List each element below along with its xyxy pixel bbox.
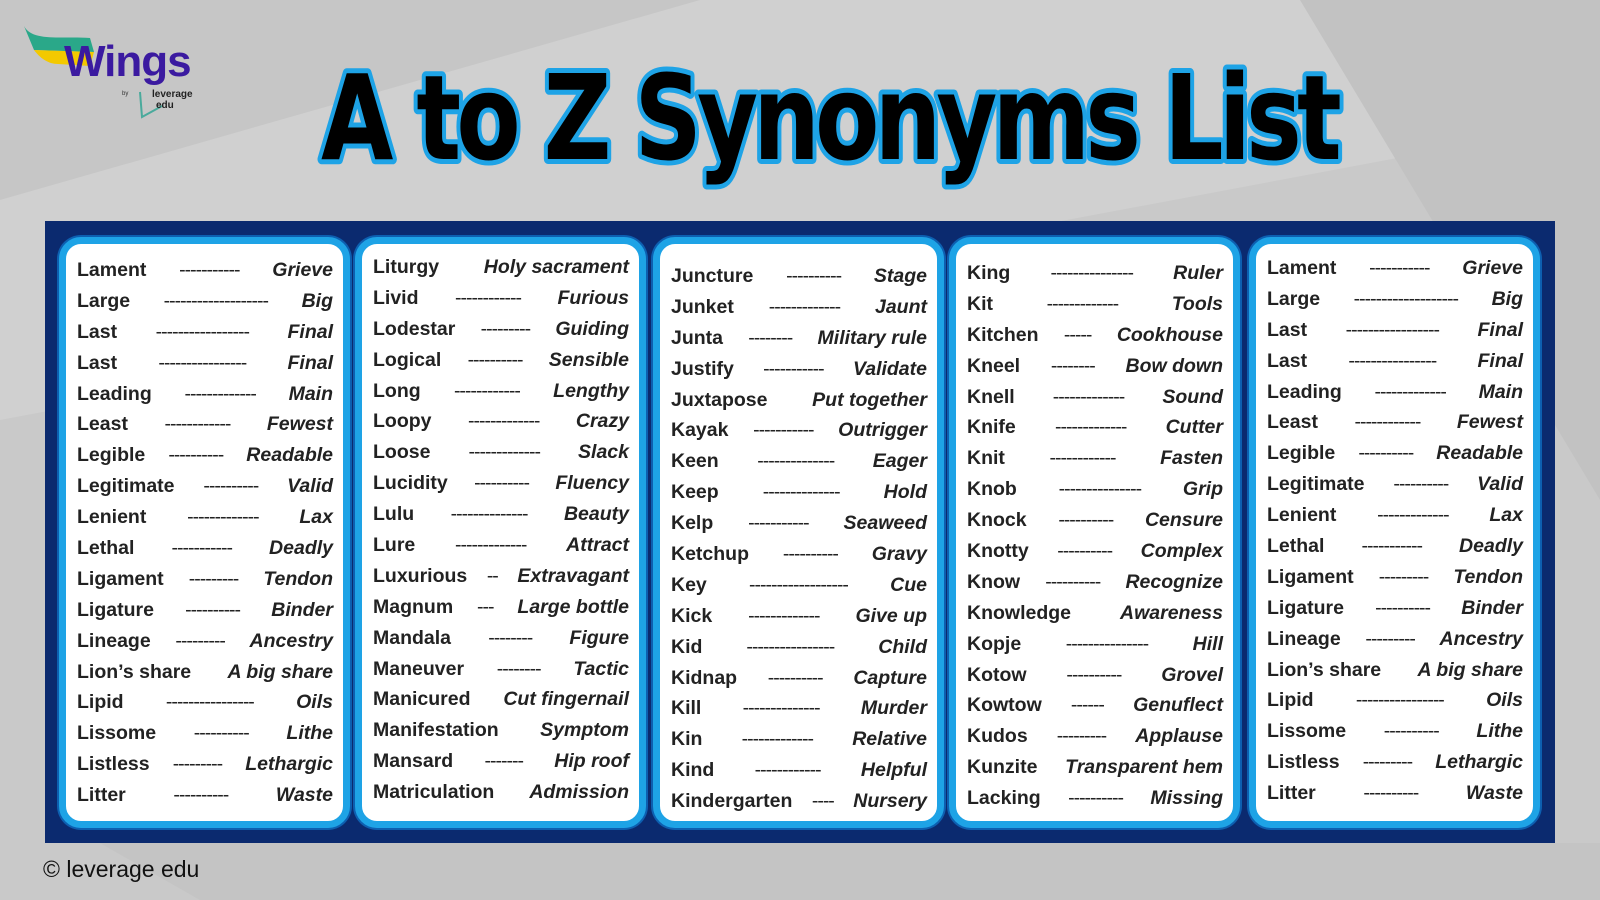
logo: Wings: Wings — [64, 37, 191, 86]
card: column 3: -------- — [748, 327, 792, 349]
card: column 3: Cue — [890, 574, 927, 596]
card: column 4: -------- — [1051, 355, 1095, 377]
card: column 4: Kunzite — [967, 756, 1037, 778]
card: column 2: Lodestar — [373, 318, 455, 340]
card: column 4: --------------- — [1059, 478, 1141, 500]
card: column 1: Large — [77, 290, 130, 312]
card: column 4: --------------- — [1066, 633, 1148, 655]
card: column 1: --------- — [173, 753, 222, 775]
card: column 5: Oils — [1486, 689, 1523, 711]
card: column 5: Lenient — [1267, 504, 1336, 526]
card: column 5 — [1249, 237, 1540, 828]
card: column 5: --------- — [1379, 566, 1428, 588]
card: column 3: Kick — [671, 605, 712, 627]
card: column 2 — [355, 237, 646, 828]
card: column 4: --------- — [1057, 725, 1106, 747]
card: column 1: Lament — [77, 259, 146, 281]
card: column 3: Kid — [671, 636, 702, 658]
card: column 1: Ancestry — [250, 630, 333, 652]
card: column 4: Bow down — [1126, 355, 1223, 377]
card: column 5: ---------- — [1384, 720, 1439, 742]
card: column 5: Lissome — [1267, 720, 1346, 742]
card: column 4: Knell — [967, 386, 1015, 408]
card: column 3: ------------------ — [749, 574, 848, 596]
card: column 1: Lipid — [77, 691, 124, 713]
card: column 4: ---------- — [1066, 664, 1121, 686]
card: column 4: Grip — [1183, 478, 1223, 500]
card: column 1: Final — [287, 352, 333, 374]
card: column 3: Stage — [874, 265, 927, 287]
card: column 4: ------------ — [1050, 447, 1115, 469]
card: column 4: ----- — [1064, 324, 1091, 346]
card: column 2: Furious — [558, 287, 629, 309]
card: column 2: Manifestation — [373, 719, 499, 741]
card: column 2: Lulu — [373, 503, 414, 525]
card: column 1: Lissome — [77, 722, 156, 744]
card: column 3: ----------- — [753, 419, 814, 441]
card: column 4: Missing — [1150, 787, 1223, 809]
card: column 3: ---- — [812, 790, 834, 812]
card: column 2: Logical — [373, 349, 441, 371]
card: column 5: ------------------- — [1354, 288, 1458, 310]
card: column 2: Holy sacrament — [484, 256, 629, 278]
card: column 3: Kindergarten — [671, 790, 792, 812]
card: column 3: Validate — [853, 358, 927, 380]
card: column 1: Litter — [77, 784, 126, 806]
card: column 2: ------------- — [468, 410, 539, 432]
card: column 1: ----------------- — [156, 321, 249, 343]
card: column 4: Knowledge — [967, 602, 1071, 624]
card: column 2: Beauty — [564, 503, 629, 525]
card: column 5: ---------- — [1393, 473, 1448, 495]
card: column 4: ------------- — [1047, 293, 1118, 315]
card: column 2: -------- — [488, 627, 532, 649]
card: column 1: Ligament — [77, 568, 164, 590]
card: column 4: ---------- — [1057, 540, 1112, 562]
card: column 5: Main — [1479, 380, 1523, 402]
card: column 5: Binder — [1461, 597, 1523, 619]
card: column 3: ---------------- — [746, 636, 834, 658]
card: column 3: Hold — [884, 481, 927, 503]
card: column 1: ------------- — [184, 382, 256, 404]
card: column 3: ------------- — [769, 296, 840, 318]
card: column 5: Final — [1477, 350, 1523, 372]
card: column 3: Keen — [671, 450, 719, 472]
card: column 2: Cut fingernail — [503, 688, 629, 710]
card: column 2: -- — [487, 565, 498, 587]
card: column 4: Transparent hem — [1065, 756, 1223, 778]
card: column 5: A big share — [1418, 659, 1523, 681]
card: column 2: Lengthy — [553, 380, 629, 402]
card: column 2: Sensible — [549, 349, 629, 371]
card: column 5: Ancestry — [1440, 628, 1523, 650]
card: column 5: Big — [1492, 288, 1523, 310]
card: column 3: Juncture — [671, 265, 753, 287]
card: column 3: Kill — [671, 697, 701, 719]
card: column 3: Juxtapose — [671, 388, 767, 410]
card: column 4: Knob — [967, 478, 1017, 500]
card: column 4: Recognize — [1125, 571, 1223, 593]
card: column 3: -------------- — [743, 697, 820, 719]
card: column 1 — [59, 237, 350, 828]
card: column 4: --------------- — [1051, 262, 1133, 284]
card: column 4: Kitchen — [967, 324, 1039, 346]
card: column 1: Grieve — [272, 259, 333, 281]
card: column 3: Seaweed — [844, 512, 927, 534]
card: column 1: Oils — [296, 691, 333, 713]
card: column 4 — [949, 237, 1240, 828]
card: column 1: Valid — [287, 475, 333, 497]
card: column 5: Lethal — [1267, 535, 1324, 557]
card: column 2: ------- — [484, 750, 523, 772]
card: column 5: Ligament — [1267, 566, 1354, 588]
card: column 1: ---------- — [168, 444, 223, 466]
logo: Wings: by — [122, 91, 128, 97]
card: column 4: Knife — [967, 416, 1016, 438]
card: column 1: ------------------- — [164, 290, 268, 312]
card: column 4: Knotty — [967, 540, 1029, 562]
card: column 1: Legible — [77, 444, 145, 466]
card: column 2: Slack — [578, 441, 629, 463]
card: column 1: ---------- — [203, 475, 258, 497]
card: column 2: Mansard — [373, 750, 453, 772]
card: column 5: Final — [1477, 319, 1523, 341]
card: column 1: Big — [302, 290, 333, 312]
card: column 5: Readable — [1436, 442, 1523, 464]
card: column 2: Magnum — [373, 596, 453, 618]
card: column 3: Nursery — [853, 790, 927, 812]
card: column 4: Kneel — [967, 355, 1020, 377]
card: column 1: Last — [77, 352, 117, 374]
card: column 1: Last — [77, 321, 117, 343]
card: column 4: Applause — [1135, 725, 1223, 747]
card: column 4: Kowtow — [967, 694, 1042, 716]
card: column 3: ------------ — [755, 759, 821, 781]
card: column 3: Kidnap — [671, 667, 737, 689]
card: column 3: Murder — [861, 697, 927, 719]
card: column 1: ---------- — [185, 599, 240, 621]
card: column 4: ---------- — [1068, 787, 1123, 809]
card: column 1: ----------- — [172, 537, 232, 559]
card: column 4: Ruler — [1173, 262, 1223, 284]
card: column 4: Tools — [1172, 293, 1223, 315]
card: column 4: King — [967, 262, 1010, 284]
card: column 4: ---------- — [1045, 571, 1100, 593]
card: column 1: A big share — [228, 661, 333, 683]
card: column 5: ---------------- — [1356, 689, 1444, 711]
card: column 4: ------------- — [1055, 416, 1126, 438]
card: column 3: Ketchup — [671, 543, 749, 565]
card: column 1: ------------ — [164, 413, 230, 435]
card: column 1: ---------- — [194, 722, 249, 744]
card: column 2: Manicured — [373, 688, 471, 710]
card: column 5: ------------- — [1374, 380, 1446, 402]
card: column 2: --------- — [481, 318, 530, 340]
card: column 3 — [653, 237, 944, 828]
card: column 3: Give up — [855, 605, 927, 627]
card: column 3: Jaunt — [875, 296, 927, 318]
card: column 5: Last — [1267, 350, 1307, 372]
card: column 5: Legible — [1267, 442, 1335, 464]
card: column 2: ------------- — [469, 441, 540, 463]
card: column 4: Hill — [1193, 633, 1223, 655]
card: column 5: Lion’s share — [1267, 659, 1381, 681]
card: column 5: Lithe — [1476, 720, 1523, 742]
card: column 1: Fewest — [267, 413, 333, 435]
card: column 3: Relative — [852, 728, 927, 750]
card: column 3: Child — [878, 636, 927, 658]
card: column 2: Extravagant — [517, 565, 629, 587]
card: column 3: Kind — [671, 759, 714, 781]
card: column 2: Long — [373, 380, 421, 402]
card: column 5: Last — [1267, 319, 1307, 341]
card: column 5: Deadly — [1459, 535, 1523, 557]
logo: Wings: edu — [156, 100, 174, 111]
card: column 4: Know — [967, 571, 1020, 593]
card: column 3: Junta — [671, 327, 723, 349]
card: column 3: Outrigger — [838, 419, 927, 441]
card: column 1: --------- — [189, 568, 238, 590]
card: column 1: Lineage — [77, 630, 151, 652]
card: column 1: ---------------- — [158, 352, 246, 374]
card: column 1: Legitimate — [77, 475, 175, 497]
card: column 5: Lethargic — [1435, 751, 1523, 773]
card: column 3: Military rule — [818, 327, 927, 349]
card: column 5: Litter — [1267, 782, 1316, 804]
card: column 5: --------- — [1363, 751, 1412, 773]
card: column 2: Tactic — [573, 658, 629, 680]
card: column 5: Lineage — [1267, 628, 1341, 650]
card: column 3: ----------- — [763, 358, 824, 380]
card: column 2: ---------- — [468, 349, 522, 371]
card: column 5: Lament — [1267, 257, 1336, 279]
card: column 3: Justify — [671, 358, 734, 380]
card: column 3: ---------- — [783, 543, 838, 565]
card: column 5: ---------- — [1363, 782, 1418, 804]
card: column 3: Put together — [812, 388, 927, 410]
card: column 1: Lithe — [286, 722, 333, 744]
card: column 3: ---------- — [786, 265, 841, 287]
card: column 2: ------------- — [455, 534, 526, 556]
card: column 5: Ligature — [1267, 597, 1344, 619]
card: column 3: Kin — [671, 728, 702, 750]
card: column 5: ---------- — [1358, 442, 1413, 464]
card: column 1: ---------- — [173, 784, 228, 806]
card: column 1: Main — [289, 382, 333, 404]
card: column 4: Kudos — [967, 725, 1028, 747]
card: column 4: Fasten — [1160, 447, 1223, 469]
card: column 2: Lure — [373, 534, 415, 556]
card: column 5: ------------ — [1354, 411, 1420, 433]
card: column 5: Fewest — [1457, 411, 1523, 433]
card: column 4: ---------- — [1058, 509, 1113, 531]
card: column 1: ---------------- — [166, 691, 254, 713]
card: column 4: Kopje — [967, 633, 1021, 655]
card: column 2: Maneuver — [373, 658, 464, 680]
card: column 4: Sound — [1162, 386, 1223, 408]
card: column 5: Legitimate — [1267, 473, 1365, 495]
card: column 2: Livid — [373, 287, 419, 309]
card: column 5: Listless — [1267, 751, 1340, 773]
card: column 3: Capture — [853, 667, 927, 689]
card: column 3: ---------- — [768, 667, 823, 689]
card: column 1: Listless — [77, 753, 150, 775]
card: column 4: Cookhouse — [1117, 324, 1223, 346]
card: column 5: Valid — [1477, 473, 1523, 495]
card: column 2: -------- — [497, 658, 541, 680]
card: column 5: Grieve — [1462, 257, 1523, 279]
card: column 2: -------------- — [451, 503, 528, 525]
footer credit: © leverage edu — [43, 856, 199, 882]
card: column 2: Figure — [569, 627, 629, 649]
card: column 1: Final — [287, 321, 333, 343]
card: column 1: Ligature — [77, 599, 154, 621]
card: column 4: Genuflect — [1133, 694, 1223, 716]
card: column 4: Lacking — [967, 787, 1041, 809]
card: column 4: Knock — [967, 509, 1027, 531]
card: column 3: Kelp — [671, 512, 713, 534]
card: column 1: Lethargic — [245, 753, 333, 775]
card: column 2: Symptom — [540, 719, 629, 741]
card: column 2: Mandala — [373, 627, 451, 649]
card: column 2: Admission — [529, 781, 629, 803]
card: column 4: Grovel — [1161, 664, 1223, 686]
card: column 2: Hip roof — [554, 750, 629, 772]
card: column 2: Guiding — [555, 318, 629, 340]
card: column 2: Loose — [373, 441, 430, 463]
card: column 1: Tendon — [263, 568, 333, 590]
card: column 3: -------------- — [763, 481, 840, 503]
panel: navy background — [45, 221, 1555, 843]
card: column 5: --------- — [1365, 628, 1415, 650]
card: column 1: ------------- — [187, 506, 259, 528]
logo: Wings: leverage — [152, 89, 193, 100]
card: column 3: Junket — [671, 296, 734, 318]
card: column 4: ------ — [1071, 694, 1104, 716]
card: column 4: Awareness — [1120, 602, 1223, 624]
card: column 1: Lax — [299, 506, 333, 528]
card: column 1: Binder — [271, 599, 333, 621]
card: column 2: ------------ — [454, 380, 520, 402]
card: column 3: Gravy — [872, 543, 927, 565]
card: column 2: ------------ — [455, 287, 521, 309]
card: column 5: Tendon — [1453, 566, 1523, 588]
card: column 5: ----------------- — [1346, 319, 1439, 341]
card: column 2: Attract — [566, 534, 629, 556]
card: column 4: Knit — [967, 447, 1005, 469]
card: column 5: ----------- — [1362, 535, 1422, 557]
card: column 2: --- — [477, 596, 494, 618]
card: column 2: Large bottle — [517, 596, 629, 618]
card: column 1: Lethal — [77, 537, 134, 559]
card: column 1: Leading — [77, 382, 152, 404]
card: column 3: Keep — [671, 481, 719, 503]
card: column 3: Key — [671, 574, 707, 596]
card: column 1: --------- — [175, 630, 225, 652]
card: column 3: Kayak — [671, 419, 728, 441]
card: column 5: ---------------- — [1348, 350, 1436, 372]
card: column 5: ------------- — [1377, 504, 1449, 526]
card: column 2: Matriculation — [373, 781, 494, 803]
card: column 1: Lion’s share — [77, 661, 191, 683]
card: column 2: Fluency — [555, 472, 629, 494]
card: column 1: Lenient — [77, 506, 146, 528]
card: column 2: Crazy — [576, 410, 629, 432]
card: column 4: Kotow — [967, 664, 1027, 686]
card: column 1: Waste — [276, 784, 333, 806]
card: column 1: Readable — [246, 444, 333, 466]
card: column 1: ----------- — [179, 259, 240, 281]
card: column 5: Lipid — [1267, 689, 1314, 711]
card: column 2: Lucidity — [373, 472, 448, 494]
card: column 3: -------------- — [757, 450, 834, 472]
card: column 4: Kit — [967, 293, 993, 315]
card: column 4: ------------- — [1053, 386, 1124, 408]
card: column 4: Cutter — [1166, 416, 1223, 438]
card: column 3: Helpful — [861, 759, 927, 781]
card: column 1: Least — [77, 413, 128, 435]
card: column 3: ------------- — [748, 605, 820, 627]
card: column 5: Lax — [1489, 504, 1523, 526]
card: column 5: ---------- — [1375, 597, 1430, 619]
card: column 3: Eager — [873, 450, 927, 472]
card: column 5: Large — [1267, 288, 1320, 310]
card: column 2: ---------- — [474, 472, 529, 494]
card: column 3: ----------- — [748, 512, 809, 534]
card: column 5: ----------- — [1369, 257, 1430, 279]
logo: Wings — [24, 26, 193, 118]
card: column 4: Complex — [1141, 540, 1223, 562]
card: column 5: Least — [1267, 411, 1318, 433]
card: column 2: Liturgy — [373, 256, 439, 278]
card: column 1: Deadly — [269, 537, 333, 559]
card: column 2: Loopy — [373, 410, 432, 432]
card: column 2: Luxurious — [373, 565, 467, 587]
card: column 5: Leading — [1267, 380, 1342, 402]
card: column 5: Waste — [1466, 782, 1523, 804]
card: column 4: Censure — [1145, 509, 1223, 531]
card: column 3: ------------- — [742, 728, 813, 750]
